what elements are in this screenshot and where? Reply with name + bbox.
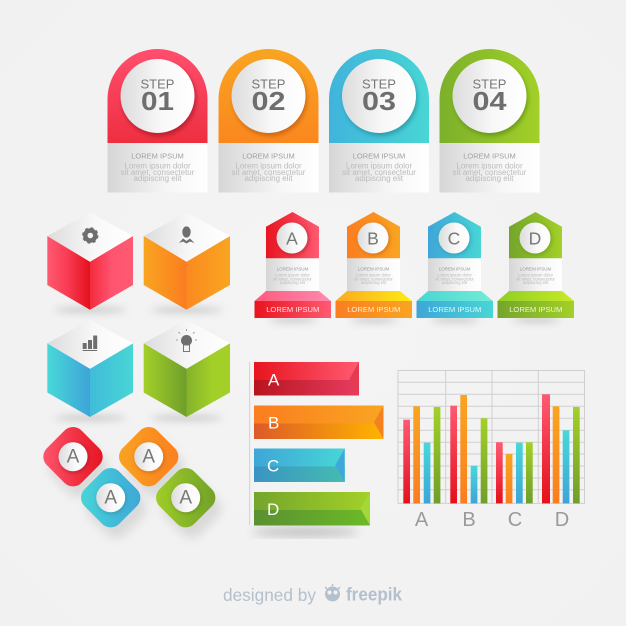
axis labels: B — [462, 509, 476, 531]
diamond badge blue — [76, 463, 151, 543]
axis labels: A — [415, 509, 429, 531]
step card 01: adipiscing elit — [133, 174, 182, 183]
bar C: C — [267, 457, 279, 476]
icon: gear — [83, 228, 97, 242]
bar B — [254, 406, 384, 439]
bar B: B — [268, 413, 279, 432]
step card 03: LOREM IPSUM — [353, 152, 405, 160]
diamond badge red: A — [67, 447, 80, 468]
group D columns — [542, 394, 580, 503]
house card A: sit amet, consectetur — [273, 276, 312, 281]
house card C: adipiscing elit — [442, 280, 468, 285]
axis labels: D — [555, 509, 569, 531]
house card A: LOREM IPSUM — [266, 305, 319, 314]
bar C — [254, 448, 345, 482]
house card C: Lorem ipsum dolor — [437, 272, 472, 278]
house card C: LOREM IPSUM — [428, 305, 481, 314]
footer credit: freepik — [346, 584, 403, 604]
diamond badge green: A — [179, 488, 192, 508]
diamond badge blue: A — [104, 488, 117, 508]
diamond badge red — [38, 422, 113, 502]
step card 03: STEP — [362, 76, 396, 91]
house card C: C — [448, 228, 460, 248]
step card 03: sit amet, consectetur — [342, 168, 416, 177]
cube: light bulb — [144, 320, 230, 420]
step card 03: adipiscing elit — [355, 174, 404, 183]
diamond badge orange: A — [142, 447, 155, 468]
step card 04: adipiscing elit — [465, 174, 514, 183]
step card 01: 01 — [141, 88, 174, 116]
axis labels: C — [508, 509, 522, 531]
step card 01: LOREM IPSUM — [131, 152, 184, 160]
step card 02: adipiscing elit — [244, 174, 293, 183]
house card D: adipiscing elit — [523, 280, 549, 285]
house card D: LOREM IPSUM — [509, 305, 562, 314]
house card D: D — [529, 228, 541, 248]
house card A — [254, 212, 331, 322]
horizontal bar chart — [249, 362, 384, 536]
step card 02: LOREM IPSUM — [242, 152, 295, 160]
house card B: Lorem ipsum dolor — [356, 272, 391, 278]
house card A: Lorem ipsum dolor — [275, 272, 310, 278]
column chart — [398, 370, 584, 531]
step card 04 — [440, 49, 540, 192]
step card 02: STEP — [252, 76, 285, 91]
house card A: adipiscing elit — [280, 280, 306, 285]
cube: person — [144, 212, 230, 312]
icon: bars — [83, 336, 97, 351]
group C columns — [496, 442, 533, 503]
icon: freepik mascot — [325, 584, 340, 602]
step card 01: STEP — [141, 76, 174, 91]
house card B — [336, 212, 412, 322]
step card 02: sit amet, consectetur — [232, 168, 306, 177]
group A columns — [403, 406, 440, 503]
house card D: sit amet, consectetur — [516, 276, 555, 281]
step card 03: Lorem ipsum dolor — [346, 161, 412, 170]
house card B: adipiscing elit — [361, 280, 387, 285]
diamond badge orange — [114, 422, 189, 502]
house card A: A — [286, 228, 298, 248]
house card C — [416, 212, 493, 322]
house card C: LOREM IPSUM — [439, 266, 470, 271]
footer credit: designed by — [223, 585, 316, 605]
house card B: LOREM IPSUM — [358, 266, 389, 271]
group B columns — [450, 395, 487, 503]
icon: person — [179, 226, 194, 244]
step card 04: 04 — [472, 88, 507, 116]
step card 02: Lorem ipsum dolor — [235, 161, 302, 170]
house card D — [498, 212, 574, 322]
house card D: Lorem ipsum dolor — [518, 272, 553, 278]
axis labels — [415, 509, 569, 531]
cube: bar chart — [47, 320, 133, 420]
icon: bulb — [176, 329, 197, 352]
bar D: D — [267, 500, 279, 519]
cube: gear — [47, 212, 133, 312]
house card A: LOREM IPSUM — [277, 266, 308, 271]
diamond badge green — [151, 463, 226, 543]
step card 03: 03 — [362, 88, 396, 116]
house card C: sit amet, consectetur — [435, 276, 474, 281]
step card 04: sit amet, consectetur — [453, 168, 527, 177]
bar A — [254, 362, 359, 396]
house card B: LOREM IPSUM — [347, 305, 400, 314]
step card 04: LOREM IPSUM — [463, 152, 516, 160]
step card 04: Lorem ipsum dolor — [456, 161, 523, 170]
step card 01: Lorem ipsum dolor — [124, 161, 191, 170]
bar D — [254, 492, 370, 526]
house card B: B — [367, 228, 379, 248]
house card B: sit amet, consectetur — [354, 276, 393, 281]
step card 02: 02 — [252, 88, 286, 116]
step card 01 — [108, 49, 208, 192]
bar A: A — [268, 371, 280, 390]
step card 01: sit amet, consectetur — [121, 168, 195, 177]
step card 04: STEP — [473, 76, 506, 91]
footer credit — [223, 584, 403, 605]
house card D: LOREM IPSUM — [520, 266, 551, 271]
step card 03 — [329, 49, 429, 192]
step card 02 — [218, 49, 318, 192]
